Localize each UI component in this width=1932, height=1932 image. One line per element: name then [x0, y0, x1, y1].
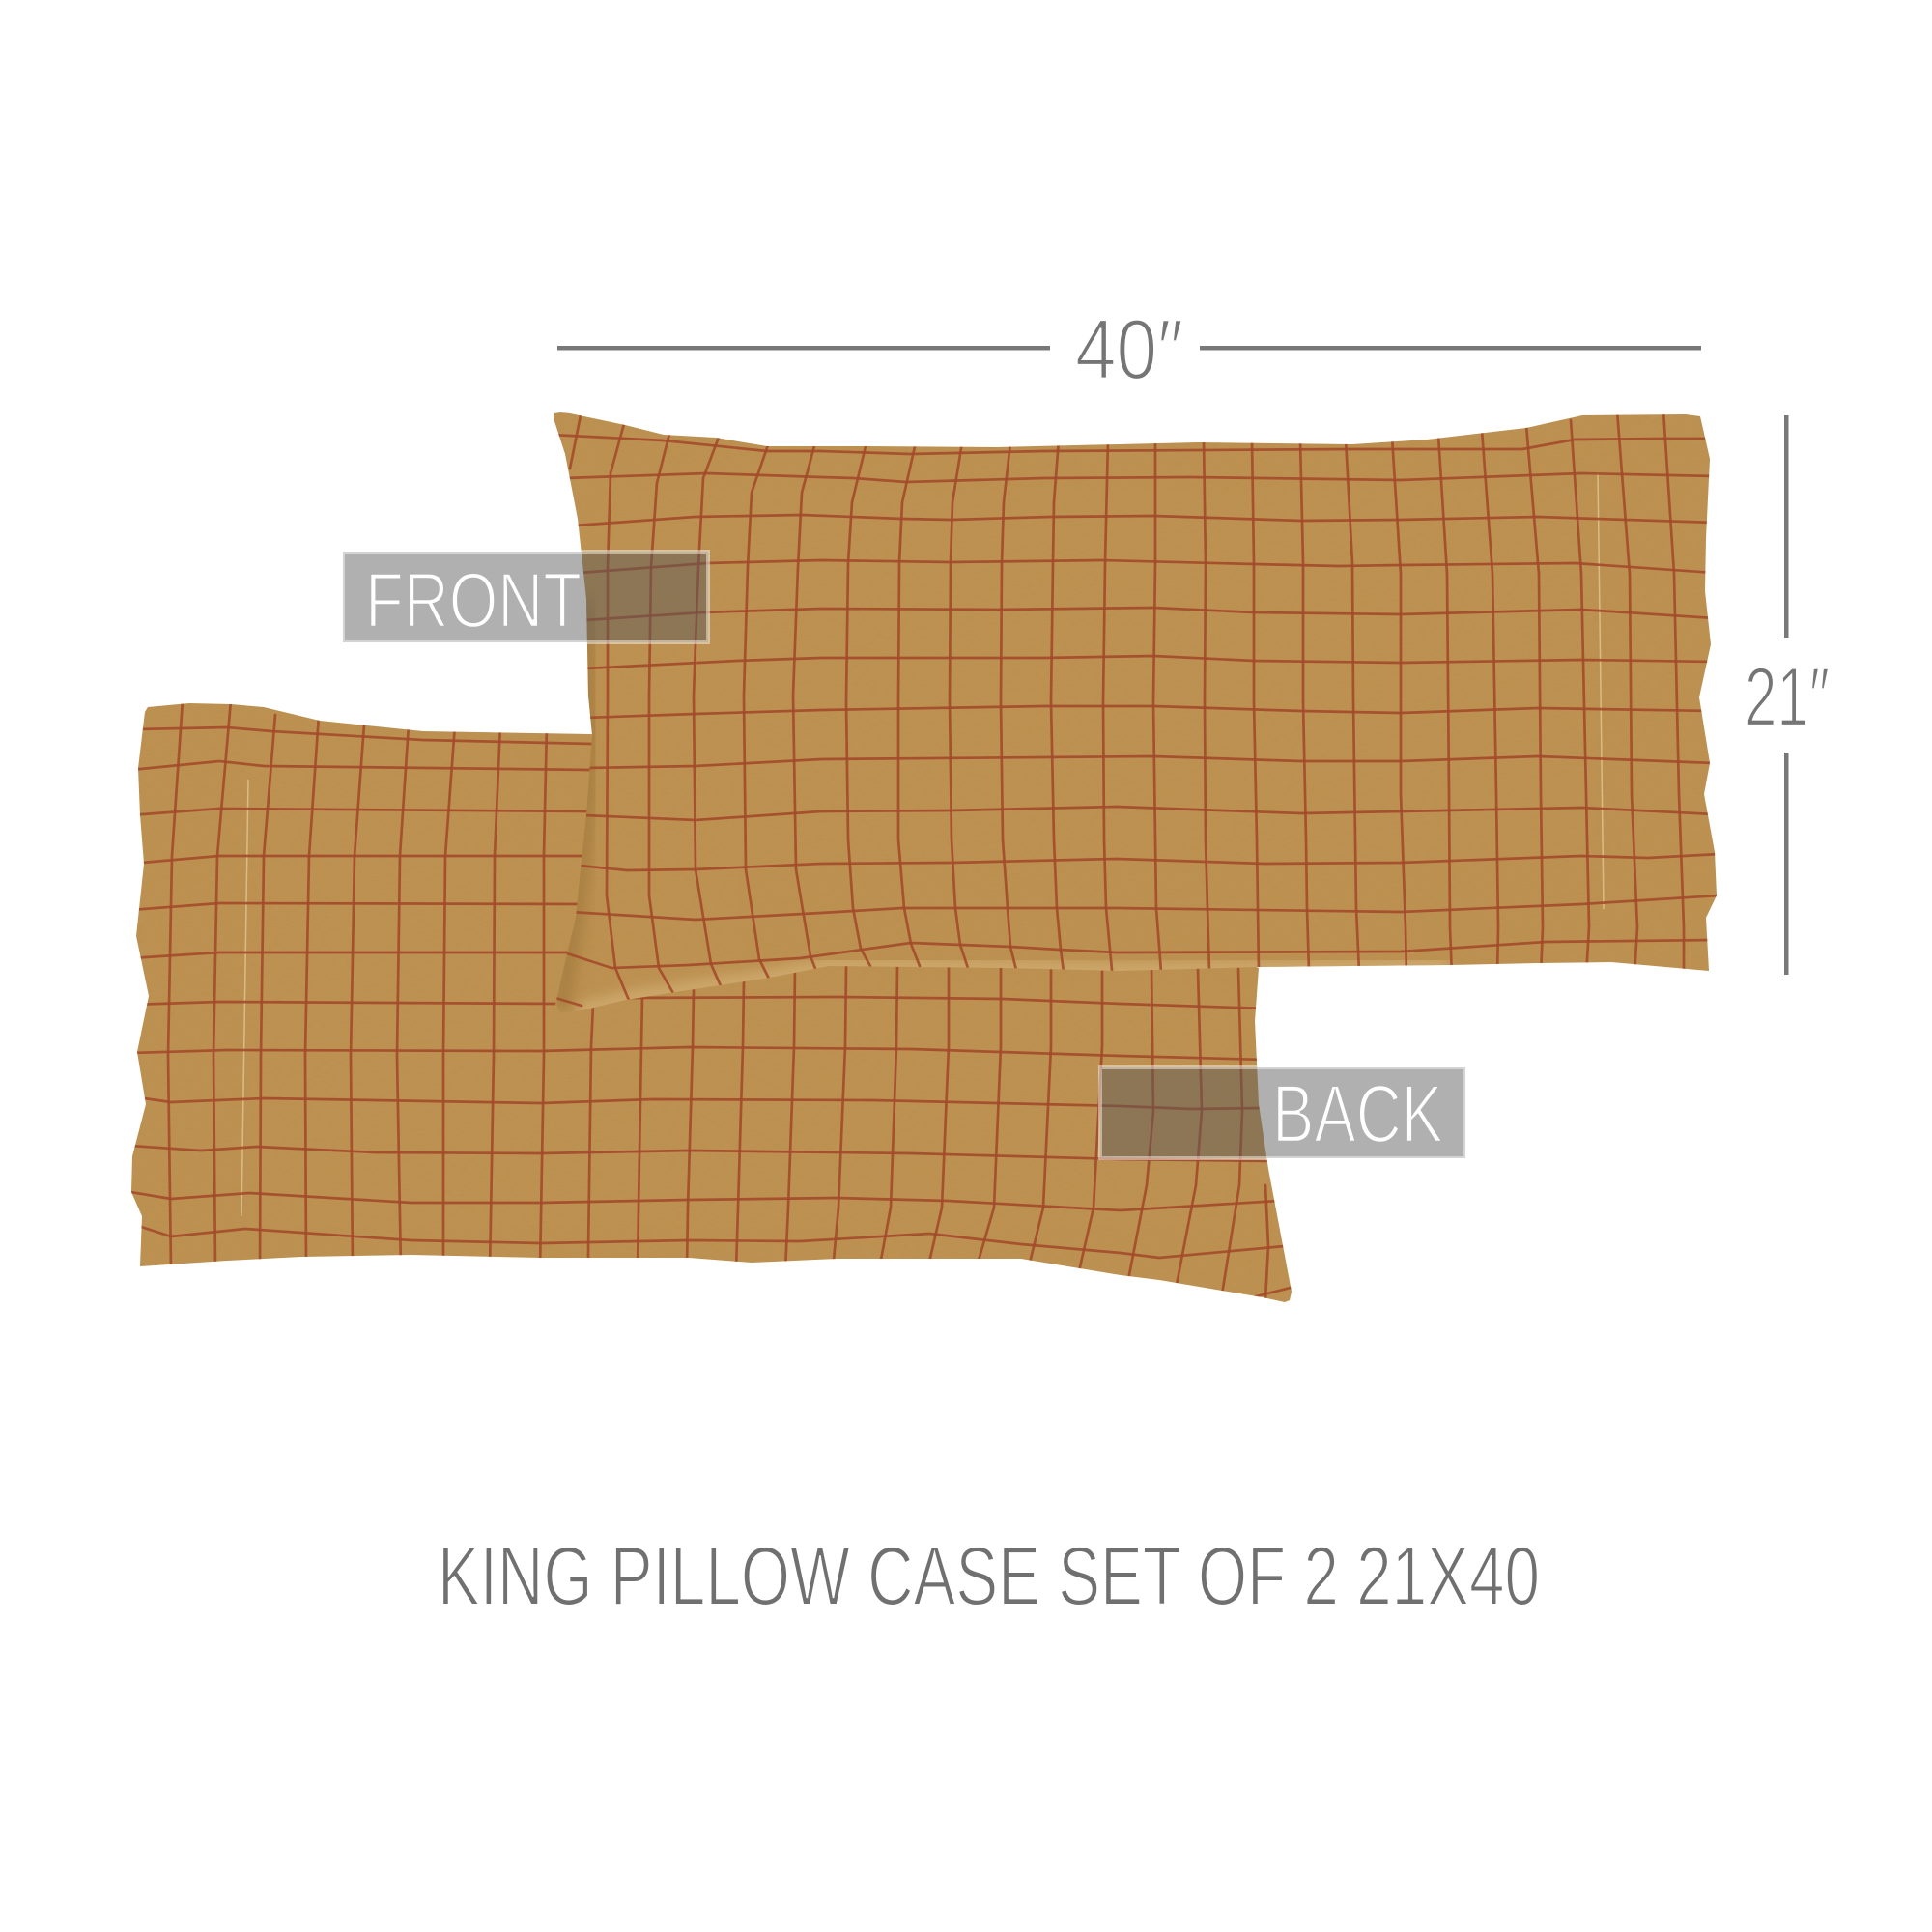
label: FRONT	[343, 552, 708, 644]
product title: KING PILLOW CASE SET OF 2 21X40	[438, 1530, 1540, 1623]
cuff stitch line	[1598, 472, 1604, 909]
front pillow vertical stripes	[570, 411, 1684, 1007]
back pillow horizontal stripes	[130, 727, 1294, 1296]
height dimension: 21 inches	[1745, 415, 1830, 975]
back pillow	[116, 696, 1304, 1314]
back pillow vertical stripes	[168, 700, 1268, 1299]
label: BACK: BACK	[1272, 1068, 1443, 1159]
cuff stitch line	[242, 780, 248, 1216]
front pillow horizontal stripes	[551, 435, 1719, 1006]
left edge shade	[560, 599, 592, 1009]
infographic canvas	[131, 321, 1828, 1605]
width dimension: 40 inches: 40″	[1075, 301, 1183, 397]
height dimension: 21 inches: 21″	[1745, 651, 1830, 744]
label: BACK	[1100, 1067, 1465, 1159]
width dimension: 40 inches	[557, 301, 1701, 397]
bottom edge highlight	[578, 965, 1449, 1011]
label: FRONT: FRONT	[365, 557, 582, 644]
front pillow	[541, 406, 1729, 1024]
